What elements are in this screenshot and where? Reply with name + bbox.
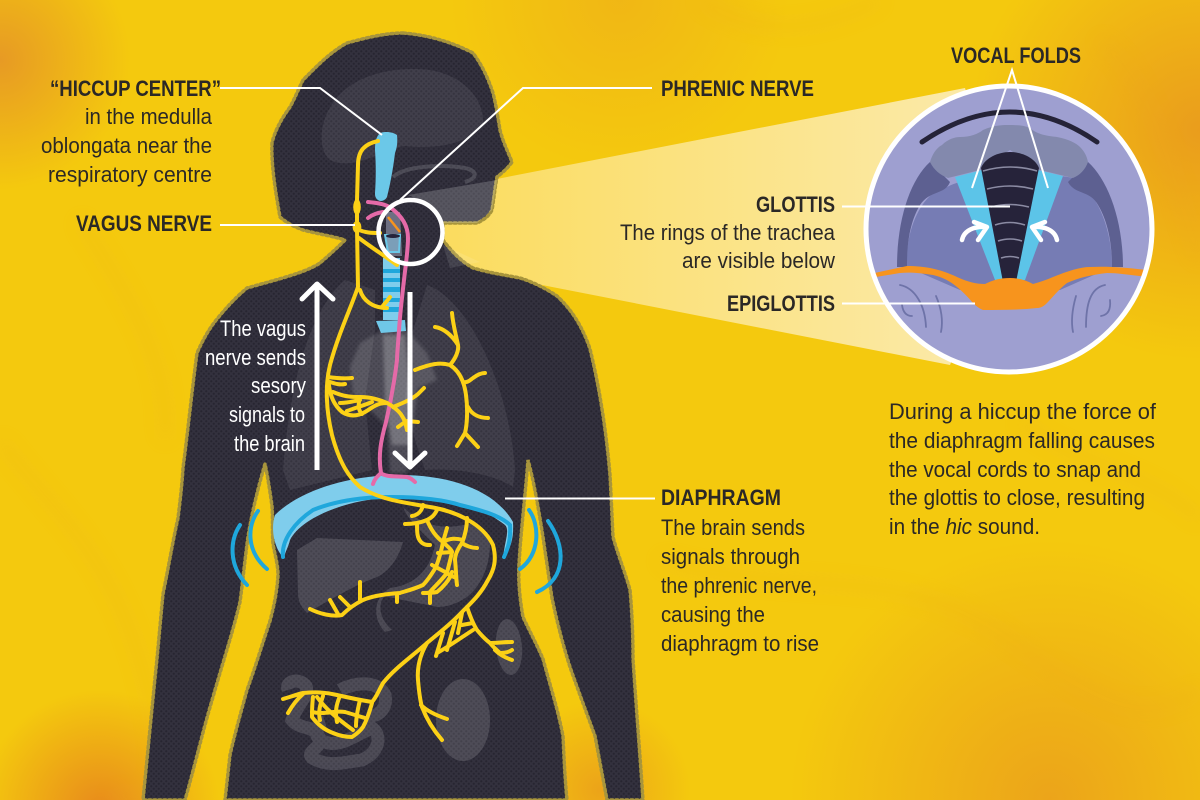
main vagus trunk xyxy=(327,141,495,702)
label: diaphragm: diaphragm to rise xyxy=(661,631,819,656)
label: hiccup center: oblongata near the xyxy=(41,133,212,158)
pink phrenic nerve xyxy=(368,202,415,484)
text: vagus nerve sends sensory signals: nerve sends xyxy=(205,345,306,370)
label: diaphragm: causing the xyxy=(661,602,765,627)
label: diaphragm xyxy=(661,485,819,656)
arrow: signals up to the brain xyxy=(302,284,333,470)
organ: heart xyxy=(350,330,437,473)
label: phrenic nerve: PHRENIC NERVE xyxy=(661,76,814,101)
organs: liver, stomach, spleen, kidney and intestines xyxy=(288,507,524,764)
label: vagus nerve: VAGUS NERVE xyxy=(76,211,212,236)
text: vagus nerve sends sensory signals: sesory xyxy=(251,373,306,398)
body silhouette xyxy=(143,33,643,800)
label: diaphragm: The brain sends xyxy=(661,515,805,540)
fold squiggles xyxy=(900,285,1110,332)
black arch xyxy=(922,112,1097,142)
explanation paragraph: the vocal cords to snap and xyxy=(889,457,1141,482)
brain xyxy=(322,69,483,163)
text: vagus nerve sends sensory signals: signals to xyxy=(229,402,305,427)
yellow vagus nerve network xyxy=(283,141,512,740)
light beam from throat to zoomed view xyxy=(440,88,1005,365)
grey tissue xyxy=(930,125,1088,178)
label: hiccup center xyxy=(41,76,221,187)
lung nerve branches xyxy=(415,364,478,447)
vocal folds xyxy=(955,170,1005,280)
explanation paragraph: the glottis to close, resulting xyxy=(889,485,1145,510)
label: glottis: The rings of the trachea xyxy=(620,220,836,245)
label: diaphragm: signals through xyxy=(661,544,800,569)
heart nerve branches xyxy=(328,377,352,384)
hiccup center in medulla xyxy=(375,132,397,201)
explanation paragraph: the diaphragm falling causes xyxy=(889,428,1155,453)
arrow: signals down to the diaphragm xyxy=(395,292,425,467)
label: hiccup center: “HICCUP CENTER” xyxy=(50,76,221,101)
label: diaphragm: DIAPHRAGM xyxy=(661,485,781,510)
label: glottis: GLOTTIS xyxy=(756,192,835,217)
small white circle around throat xyxy=(378,200,442,264)
nerve ganglion nodes xyxy=(353,199,361,215)
explanation paragraph: in the hic sound. xyxy=(889,514,1040,539)
explanation paragraph: During a hiccup the force of xyxy=(889,399,1157,424)
zoomed throat circle xyxy=(866,86,1152,372)
dark side arches xyxy=(897,162,950,267)
trachea xyxy=(376,212,406,333)
explanation paragraph xyxy=(889,399,1157,539)
leader lines xyxy=(220,70,1048,498)
blue rib motion arcs xyxy=(233,510,561,592)
text: vagus nerve sends sensory signals xyxy=(205,316,306,456)
lower branches xyxy=(467,607,512,660)
glottis and tracheal rings xyxy=(981,152,1039,282)
epiglottis xyxy=(870,266,1148,310)
label: hiccup center: respiratory centre xyxy=(48,162,212,187)
text: vagus nerve sends sensory signals: The vagus xyxy=(220,316,306,341)
intestine nerve net xyxy=(283,692,372,713)
head organs xyxy=(322,69,497,268)
inner throat wall xyxy=(907,174,1112,290)
white closing arrows xyxy=(962,222,1057,240)
stomach nerve net xyxy=(412,505,423,516)
text: vagus nerve sends sensory signals: the brain xyxy=(234,431,305,456)
diaphragm xyxy=(273,475,513,558)
label: hiccup center: in the medulla xyxy=(85,104,213,129)
label: glottis: are visible below xyxy=(682,248,835,273)
throat tissue xyxy=(408,180,497,223)
organs: lungs xyxy=(283,280,515,490)
label: diaphragm: the phrenic nerve, xyxy=(661,573,817,598)
label: vocal folds: VOCAL FOLDS xyxy=(951,43,1081,68)
larynx xyxy=(386,212,402,256)
mouth and sinus cavity xyxy=(393,166,475,182)
label: glottis xyxy=(620,192,836,273)
label: epiglottis: EPIGLOTTIS xyxy=(727,291,835,316)
